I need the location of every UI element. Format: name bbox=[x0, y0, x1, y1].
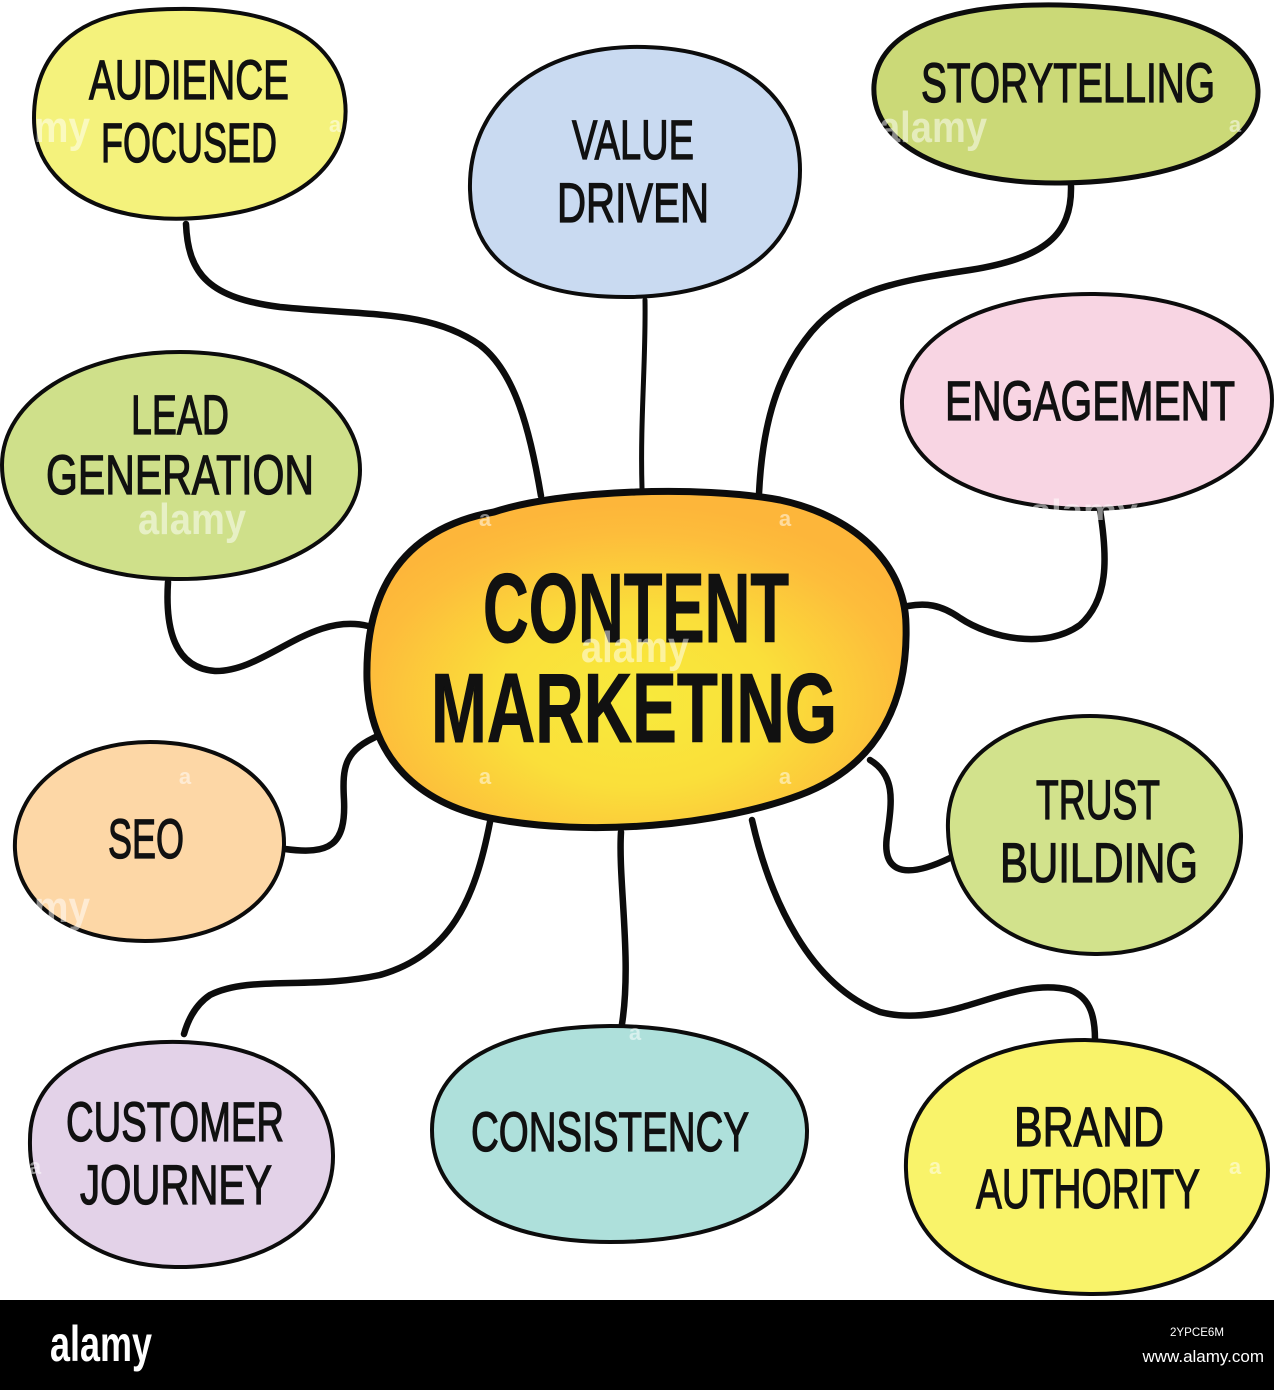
stock watermarks: a bbox=[779, 506, 792, 531]
footer logo: alamy bbox=[50, 1316, 152, 1372]
node: value driven bbox=[470, 47, 800, 297]
stock watermarks: alamy bbox=[581, 623, 689, 672]
stock watermarks: a bbox=[929, 1154, 942, 1179]
node: brand authority bbox=[906, 1040, 1268, 1294]
node: value driven: DRIVEN bbox=[557, 171, 709, 234]
stock watermarks: alamy bbox=[879, 103, 987, 152]
stock watermarks: a bbox=[779, 764, 792, 789]
node: seo bbox=[15, 742, 284, 941]
central node: content marketing: MARKETING bbox=[431, 653, 837, 763]
stock watermarks: a bbox=[479, 506, 492, 531]
node: audience focused: AUDIENCE bbox=[89, 48, 289, 111]
stock watermarks: a bbox=[179, 764, 192, 789]
node: customer journey: JOURNEY bbox=[80, 1153, 272, 1216]
node: storytelling bbox=[874, 5, 1258, 183]
connector lines bbox=[168, 186, 1105, 1040]
central node: content marketing bbox=[367, 491, 906, 828]
node: brand authority: BRAND bbox=[1014, 1095, 1164, 1158]
node: trust building: TRUST bbox=[1036, 768, 1160, 831]
stock watermarks: a bbox=[629, 1020, 642, 1045]
stock watermarks: my bbox=[34, 883, 90, 932]
node: customer journey bbox=[30, 1042, 333, 1267]
stock watermarks bbox=[29, 103, 1242, 1179]
node: trust building bbox=[948, 716, 1241, 954]
stock watermarks: alamy bbox=[138, 495, 246, 544]
node: audience focused: FOCUSED bbox=[101, 111, 277, 174]
footer image id: 2YPCE6M bbox=[1170, 1325, 1224, 1339]
node: seo: SEO bbox=[108, 807, 184, 870]
footer url: www.alamy.com bbox=[1141, 1347, 1264, 1366]
stock watermarks: a bbox=[329, 112, 342, 137]
node: lead generation bbox=[2, 352, 360, 579]
stock watermarks: a bbox=[1229, 1154, 1242, 1179]
node: audience focused bbox=[34, 9, 346, 219]
footer bar bbox=[0, 1300, 1274, 1390]
stock watermarks: alamy bbox=[1030, 494, 1138, 527]
stock watermarks: a bbox=[479, 764, 492, 789]
node: trust building: BUILDING bbox=[1000, 831, 1198, 894]
node: lead generation: GENERATION bbox=[46, 443, 314, 506]
node: value driven: VALUE bbox=[572, 108, 694, 171]
stock watermarks: a bbox=[29, 1154, 42, 1179]
stock watermarks: my bbox=[34, 103, 90, 152]
node: customer journey: CUSTOMER bbox=[66, 1090, 284, 1153]
node: lead generation: LEAD bbox=[131, 383, 229, 446]
node: consistency: CONSISTENCY bbox=[471, 1100, 749, 1163]
central node: content marketing: CONTENT bbox=[483, 553, 789, 663]
node: consistency bbox=[432, 1026, 807, 1242]
node: engagement bbox=[902, 294, 1272, 509]
stock watermarks: a bbox=[1229, 112, 1242, 137]
